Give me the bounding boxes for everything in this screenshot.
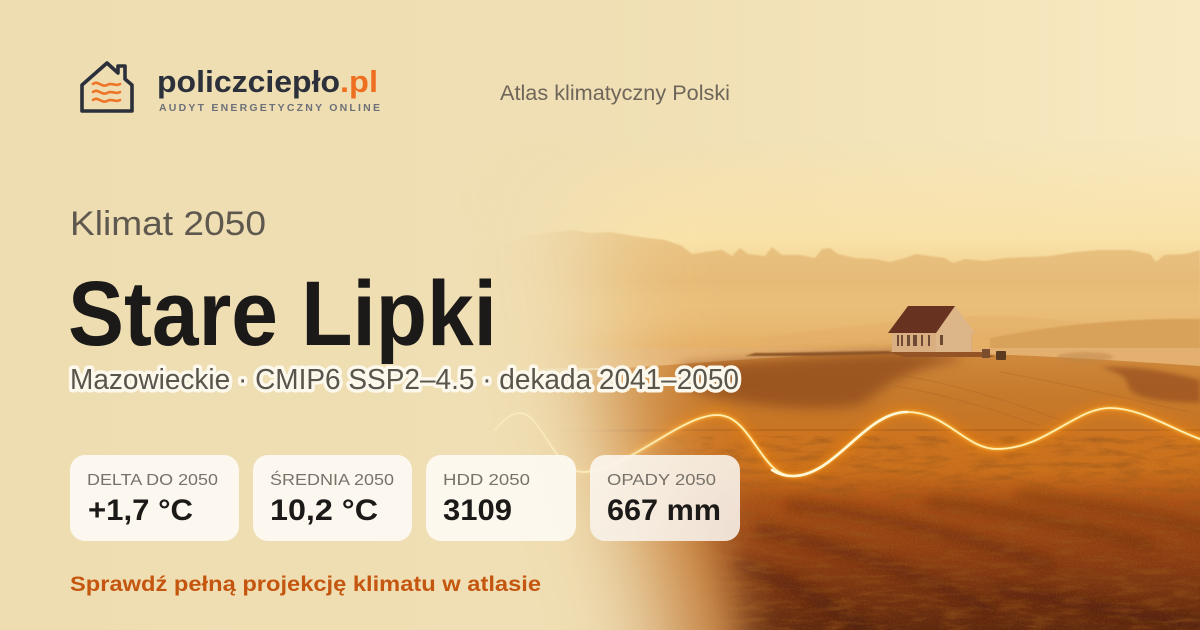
- horizon shrubs: [745, 351, 890, 356]
- logo wordmark: policzciepło: [157, 64, 340, 99]
- logo domain: .pl: [340, 64, 378, 99]
- windows: [897, 335, 943, 346]
- field furrows: [740, 495, 1200, 630]
- subtitle: Mazowieckie · CMIP6 SSP2–4.5 · dekada 2041–2050: [70, 364, 739, 396]
- logo: [82, 63, 380, 114]
- icon: house with heat waves: [82, 63, 132, 111]
- house in the field: [885, 306, 1006, 360]
- value: 10,2 °C: [270, 494, 378, 527]
- far hill: [990, 318, 1200, 348]
- value: 667 mm: [607, 494, 721, 527]
- stat card: mean: [253, 455, 412, 541]
- dune shadow: [680, 352, 962, 408]
- label: DELTA DO 2050: [87, 472, 218, 489]
- field texture: [682, 436, 1200, 630]
- car: [996, 351, 1006, 360]
- value: +1,7 °C: [88, 494, 193, 527]
- distant tree line: [546, 230, 1200, 300]
- field grain: [738, 464, 1200, 630]
- glowing wave: [495, 408, 1200, 476]
- ground strip: [885, 352, 995, 357]
- right dune shadow: [1100, 367, 1200, 403]
- label: OPADY 2050: [607, 472, 716, 489]
- distant shrubs: [1058, 352, 1112, 360]
- title: Stare Lipki: [68, 263, 497, 365]
- roof: [888, 306, 955, 333]
- logo tagline: AUDYT ENERGETYCZNY ONLINE: [159, 102, 380, 114]
- field edge line: [634, 429, 1200, 432]
- value: 3109: [443, 494, 512, 527]
- gable: [936, 306, 975, 352]
- eyebrow: Klimat 2050: [70, 205, 266, 243]
- field: [680, 431, 1200, 630]
- shed: [982, 349, 990, 358]
- horizon haze: [542, 173, 1200, 348]
- stat card: precipitation: [590, 455, 740, 541]
- dunes: [538, 354, 1200, 630]
- background: landscape: [537, 173, 1200, 630]
- wall: [892, 332, 972, 352]
- call to action: Sprawdź pełną projekcję klimatu w atlasie: [70, 572, 541, 596]
- stat card: delta: [70, 455, 239, 541]
- label: ŚREDNIA 2050: [270, 470, 394, 489]
- label: HDD 2050: [443, 472, 530, 489]
- dune furrows: [908, 372, 1165, 426]
- middle hill: [760, 316, 1150, 352]
- stat card: HDD: [426, 455, 576, 541]
- horizon band: [548, 348, 1200, 368]
- header label: Atlas klimatyczny Polski: [500, 82, 730, 105]
- wave left tail: [495, 413, 626, 472]
